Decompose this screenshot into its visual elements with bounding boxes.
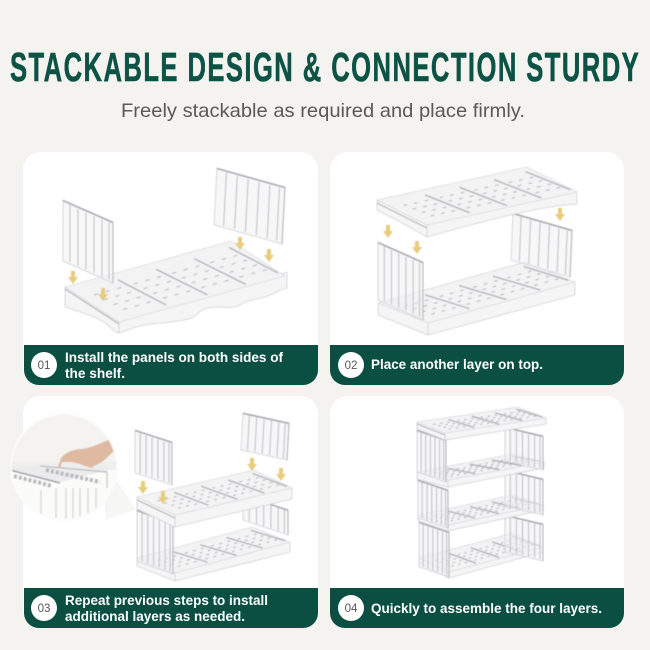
caption bar: step 1: 01: [38, 360, 50, 372]
caption bar: step 1: the shelf.: [65, 365, 125, 381]
caption bar: step 3: 03: [38, 603, 50, 615]
panel: step 4: [330, 396, 624, 628]
panel: step 1: [23, 152, 318, 385]
caption bar: step 2: Place another layer on top.: [371, 356, 543, 372]
subtitle: Freely stackable as required and place firmly.: [121, 100, 525, 122]
caption bar: step 3: [24, 588, 318, 628]
caption bar: step 2: 02: [345, 360, 357, 372]
illustration: shelf with two side panels: [63, 168, 287, 333]
inset: hand pressing shelf: [10, 413, 136, 521]
panel: step 2: [330, 152, 624, 385]
illustration: second layer above assembled shelf: [377, 167, 577, 335]
illustration: repeating the panel installation: [135, 413, 292, 581]
caption bar: step 1: Install the panels on both sides of: [65, 349, 283, 365]
illustration: four-layer assembled shelf: [417, 407, 546, 578]
caption bar: step 4: Quickly to assemble the four layers.: [371, 600, 602, 616]
caption bar: step 3: Repeat previous steps to install: [65, 592, 268, 608]
caption bar: step 1: [24, 345, 318, 385]
title: STACKABLE DESIGN & CONNECTION STURDY: [10, 45, 639, 91]
caption bar: step 4: [330, 588, 624, 628]
caption bar: step 2: [330, 345, 624, 385]
panel: step 3: [10, 396, 318, 628]
caption bar: step 4: 04: [345, 603, 358, 615]
caption bar: step 3: additional layers as needed.: [65, 608, 245, 624]
